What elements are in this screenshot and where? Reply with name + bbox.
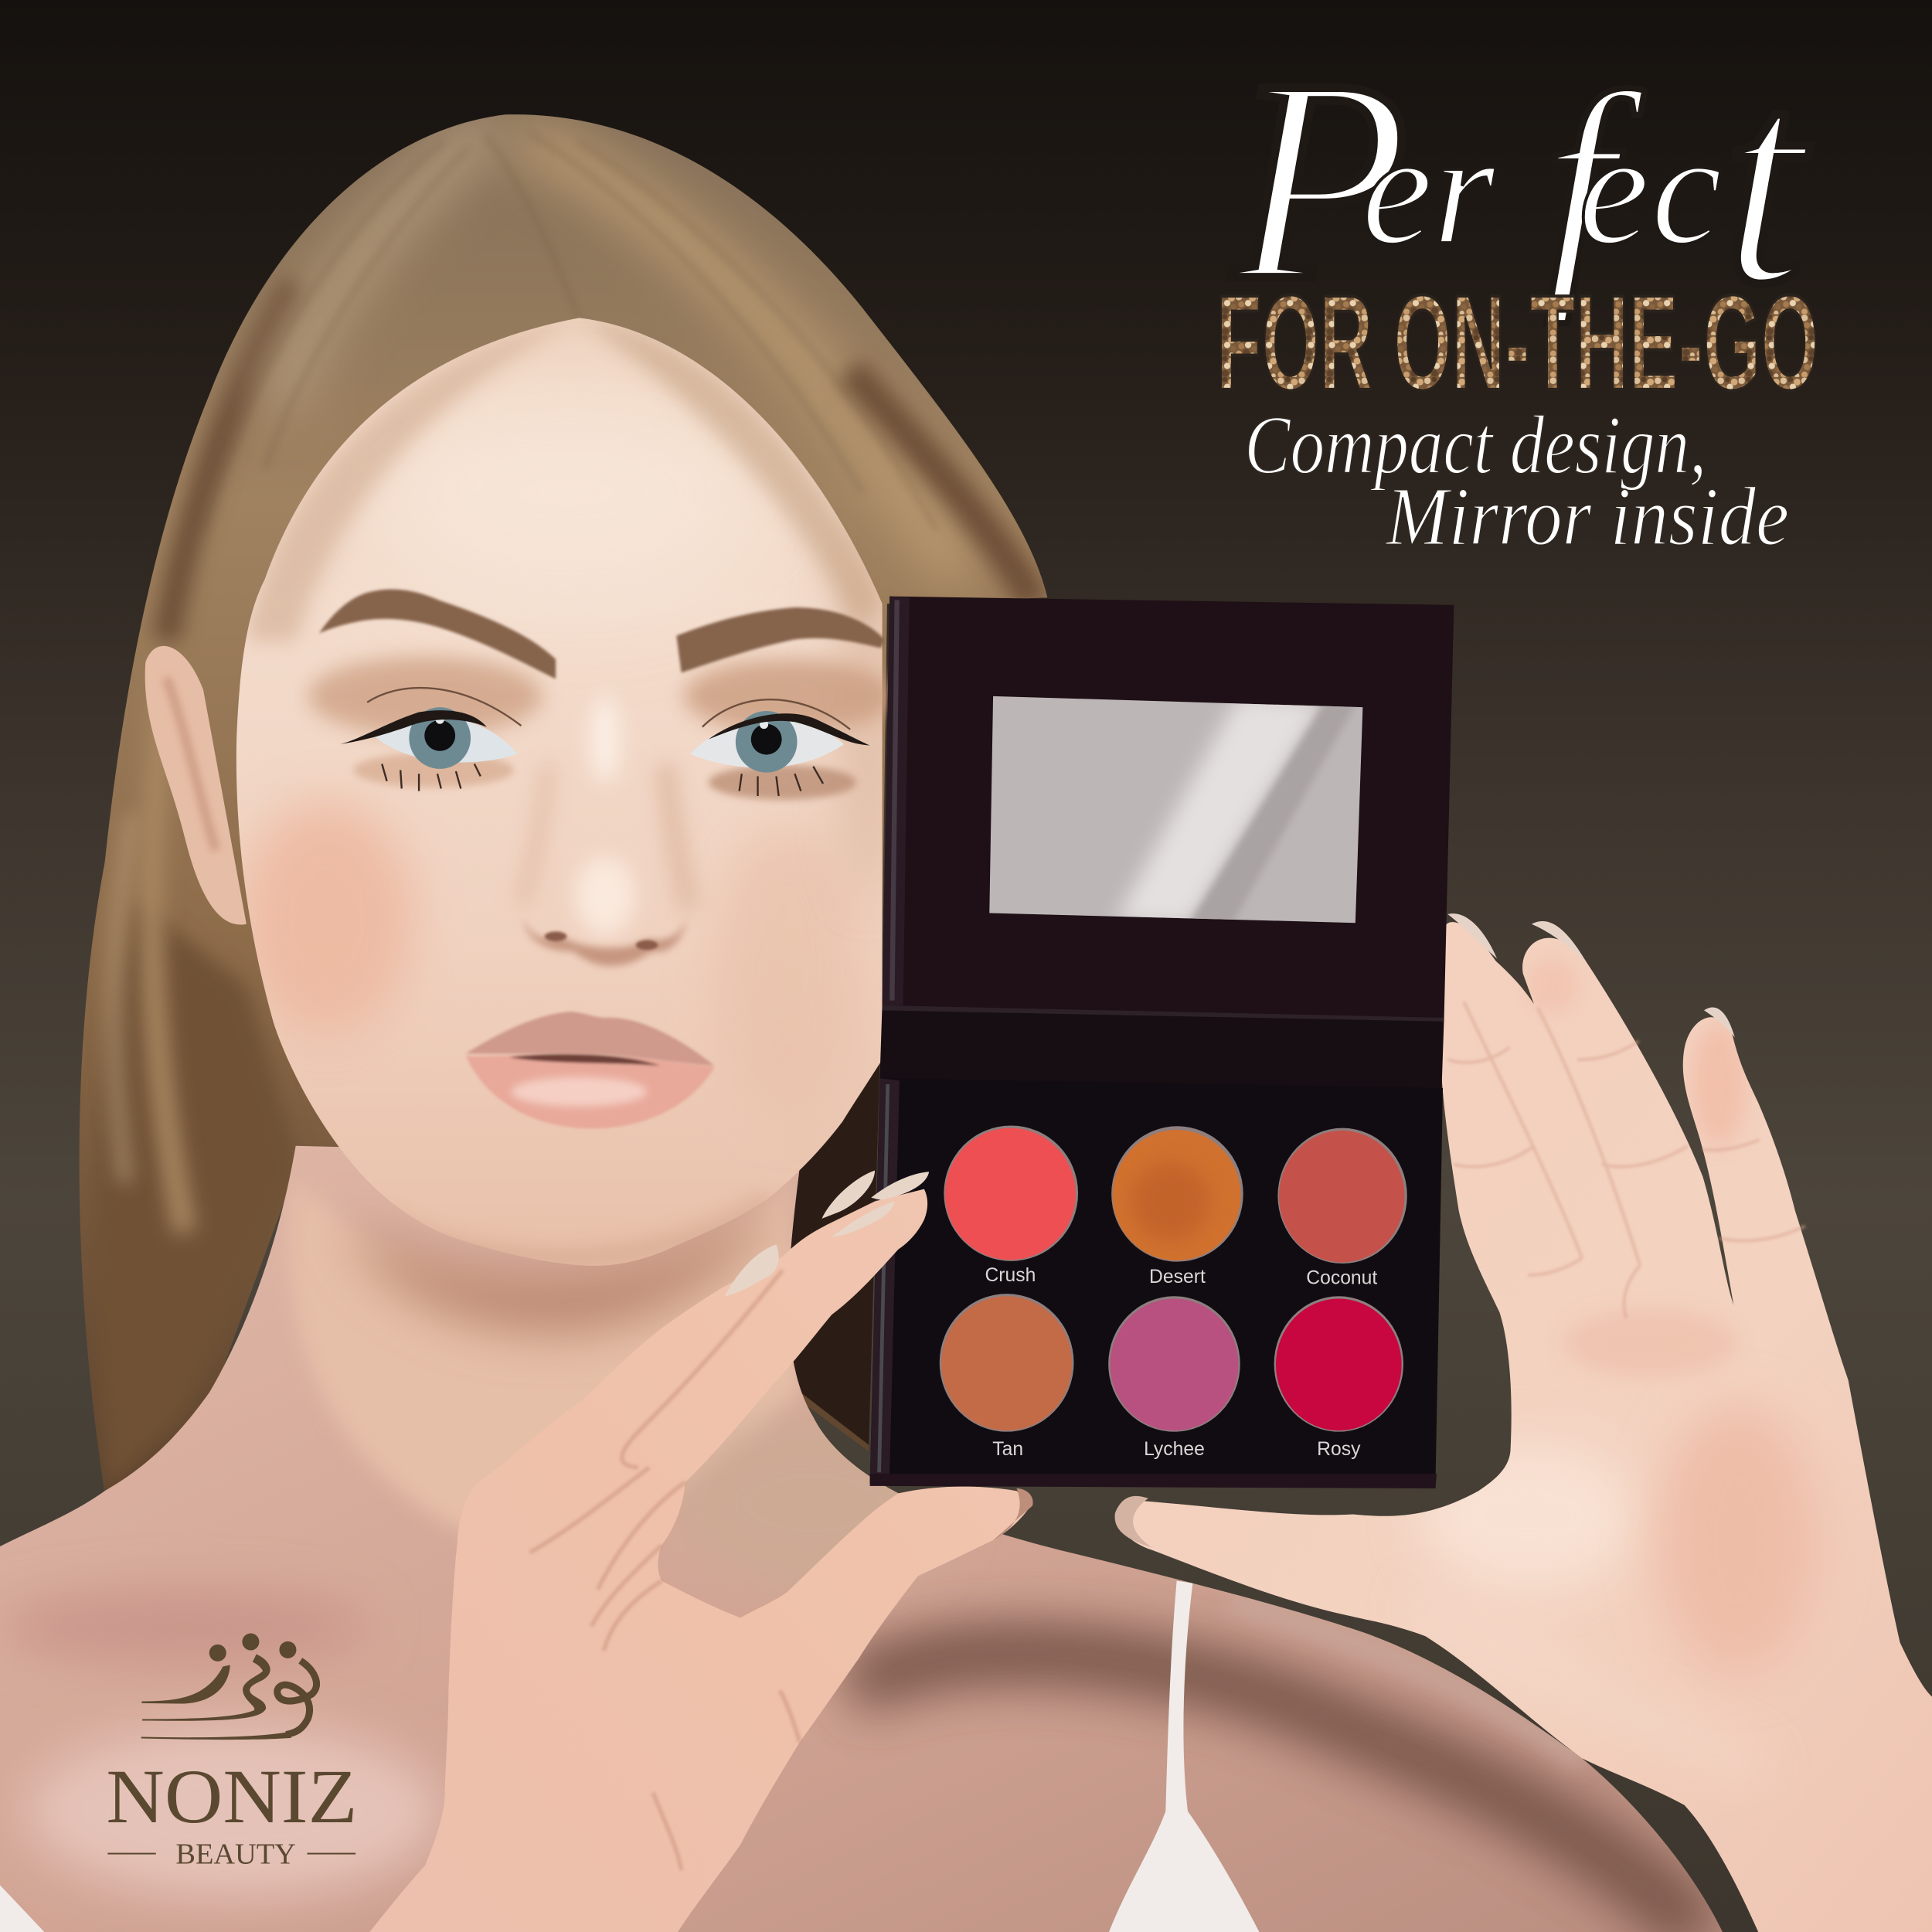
model ear	[145, 646, 247, 925]
compact palette	[870, 597, 1454, 1488]
nose	[521, 696, 690, 966]
heading: Perfect: e	[1578, 100, 1649, 277]
tagline	[1244, 399, 1789, 563]
shade: Lychee: Lychee	[1144, 1439, 1205, 1460]
shade: Coconut	[1277, 1128, 1407, 1288]
shade: Crush	[944, 1125, 1078, 1286]
wordmark: BEAUTY: BEAUTY	[175, 1838, 296, 1871]
model face	[236, 318, 896, 1266]
palette hinge	[879, 1005, 1444, 1089]
nails	[1447, 913, 1735, 1037]
eyebrows	[319, 590, 885, 679]
shade: Desert: Desert	[1149, 1267, 1206, 1287]
palette lid	[883, 597, 1454, 1018]
icon: calligraphic logo mark	[141, 1634, 317, 1740]
heading: Perfect: c	[1651, 100, 1722, 277]
shade: Desert	[1111, 1126, 1243, 1287]
wordmark: NONIZ: NONIZ	[106, 1753, 357, 1839]
tagline: Mirror inside	[1385, 471, 1789, 563]
shade: Rosy: Rosy	[1317, 1439, 1361, 1460]
nails	[725, 1171, 929, 1296]
model hair	[80, 114, 1047, 1497]
finger and palm creases	[530, 1270, 800, 1870]
right eye	[684, 659, 893, 800]
finger creases	[1447, 1002, 1805, 1318]
mirror	[989, 696, 1362, 924]
heading: Perfect: P	[1228, 20, 1409, 341]
palette tray	[870, 1078, 1443, 1485]
heading: Perfect: f	[1544, 40, 1648, 325]
heading: Perfect: t	[1723, 18, 1815, 345]
tagline: Compact design,	[1244, 399, 1706, 492]
left eye	[308, 657, 543, 791]
shade: Rosy	[1274, 1296, 1403, 1460]
model neck and shoulders	[0, 1146, 1723, 1932]
white dress and straps	[0, 1581, 1259, 1932]
heading: Perfect: r	[1433, 100, 1496, 277]
shade: Tan: Tan	[992, 1439, 1023, 1460]
brand logo	[106, 1634, 357, 1871]
right hand	[1115, 913, 1932, 1932]
shade: Coconut: Coconut	[1306, 1267, 1377, 1288]
left hand	[369, 1171, 1033, 1932]
shade: Lychee	[1108, 1296, 1240, 1460]
lips	[466, 1012, 715, 1128]
shade: Crush: Crush	[985, 1265, 1036, 1286]
shade: Tan	[940, 1294, 1074, 1460]
heading: Perfect: e	[1362, 100, 1433, 277]
